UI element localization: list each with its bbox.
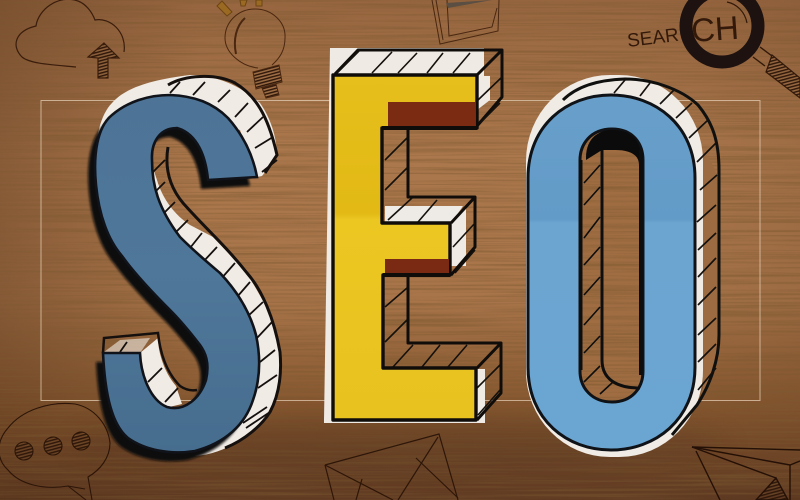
icon: browser box (432, 0, 499, 44)
E red wood recess middle (385, 259, 449, 273)
O inner wall black top (586, 130, 642, 165)
letter S (88, 75, 281, 461)
E red wood recess top (388, 102, 475, 126)
O hatch lines (614, 80, 717, 390)
thin white frame line (41, 100, 760, 400)
S black shadow (88, 104, 252, 461)
icon: search magnifier (626, 0, 800, 98)
E yellow face (333, 75, 477, 420)
soft shadow under letters (70, 415, 730, 475)
S lower paper strip (140, 338, 182, 408)
icon: search magnifier: CH (690, 9, 740, 49)
S hatch lines (120, 82, 277, 428)
icon: cloud upload (16, 0, 124, 78)
icon: light bulb (217, 0, 285, 98)
icon: envelope (325, 434, 458, 500)
O extrusion back outline (563, 79, 719, 435)
S blue face (95, 95, 259, 452)
E paper sheet (324, 48, 484, 420)
S diagonal paper strip (152, 165, 281, 456)
O wood shown right of paper (700, 150, 719, 395)
letter E (324, 48, 502, 423)
O blue face with hole (528, 95, 695, 450)
S terminal top strip (104, 338, 150, 353)
E hatch lines (337, 50, 502, 415)
O wood inside hole (582, 132, 642, 400)
icon: search magnifier: SEAR (626, 25, 680, 52)
letter O (526, 75, 719, 457)
O inner back line and hatches (581, 150, 641, 394)
icon: speech bubble (0, 403, 110, 500)
S back outlines (103, 76, 281, 448)
O paper cut-out (526, 75, 703, 457)
S top paper strip (95, 75, 277, 177)
icon: paper plane (692, 447, 800, 500)
E extrusion outline (335, 50, 502, 420)
